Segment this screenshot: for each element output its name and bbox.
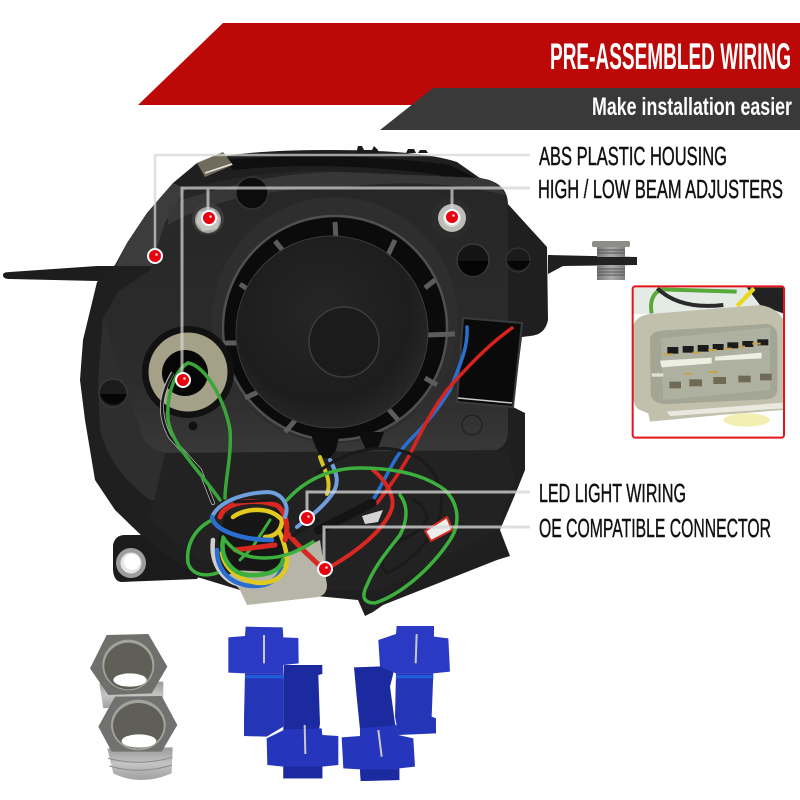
upper-left housing sheen xyxy=(116,183,188,266)
rear access window xyxy=(457,318,522,407)
aiming holes xyxy=(99,177,530,435)
leader lines xyxy=(155,155,530,569)
leader: LED light wiring xyxy=(307,492,530,518)
marker: housing xyxy=(147,248,163,264)
lower bushing xyxy=(98,696,177,780)
outer housing xyxy=(80,150,548,616)
black wire arc xyxy=(317,448,441,573)
wire splice with tape xyxy=(318,503,372,530)
rear dust cap xyxy=(212,197,458,443)
sensor black wire xyxy=(162,374,213,503)
callout markers xyxy=(147,209,460,577)
harness grommets xyxy=(310,432,384,458)
inset: connector close-up xyxy=(632,286,784,438)
lower left mounting ear xyxy=(113,535,200,582)
upper bushing xyxy=(90,634,167,708)
left side shoulder xyxy=(98,318,190,500)
big green loop xyxy=(287,468,457,603)
marker: left adjuster xyxy=(201,210,217,226)
banner: red title ribbon xyxy=(138,23,800,105)
leader: high / low beam adjusters xyxy=(182,188,530,380)
upper reflected band xyxy=(168,172,505,225)
right mounting bracket xyxy=(548,255,637,274)
marker: connector xyxy=(317,561,333,577)
left pair of connectors xyxy=(228,627,338,778)
top tabs xyxy=(356,146,428,155)
marker: bulb adjuster xyxy=(175,372,191,388)
leader: OE compatible connector xyxy=(324,527,530,569)
leader: ABS plastic housing xyxy=(155,155,530,256)
warning label xyxy=(425,517,452,541)
retaining clip xyxy=(197,152,233,177)
cap ribs xyxy=(223,222,455,432)
inner housing panel xyxy=(103,171,508,453)
banner: dark subtitle ribbon xyxy=(380,88,800,130)
socket green wire xyxy=(168,363,220,500)
threaded bushings xyxy=(90,634,177,780)
right pair of connectors xyxy=(342,626,450,781)
bundled loops xyxy=(213,540,245,585)
left mounting bracket xyxy=(3,266,170,281)
dark core of the bundle xyxy=(218,510,288,572)
right bracket bolt xyxy=(592,241,637,280)
bulb socket xyxy=(142,326,234,431)
top housing shadow band xyxy=(225,156,500,205)
right adjuster bolt xyxy=(431,198,471,238)
connector pins xyxy=(667,339,768,354)
marker: LED wiring xyxy=(299,510,315,526)
left adjuster bolt xyxy=(192,203,224,235)
marker: right adjuster xyxy=(444,209,460,225)
grey connector body xyxy=(227,540,327,605)
label: LED light wiring: LED LIGHT WIRING xyxy=(539,478,686,508)
blue wire tap connectors xyxy=(228,626,450,781)
lower housing shade xyxy=(150,450,515,590)
wire harness xyxy=(162,327,512,605)
headlight assembly xyxy=(3,146,637,616)
big red wire xyxy=(330,470,393,567)
upper wires xyxy=(320,457,329,494)
